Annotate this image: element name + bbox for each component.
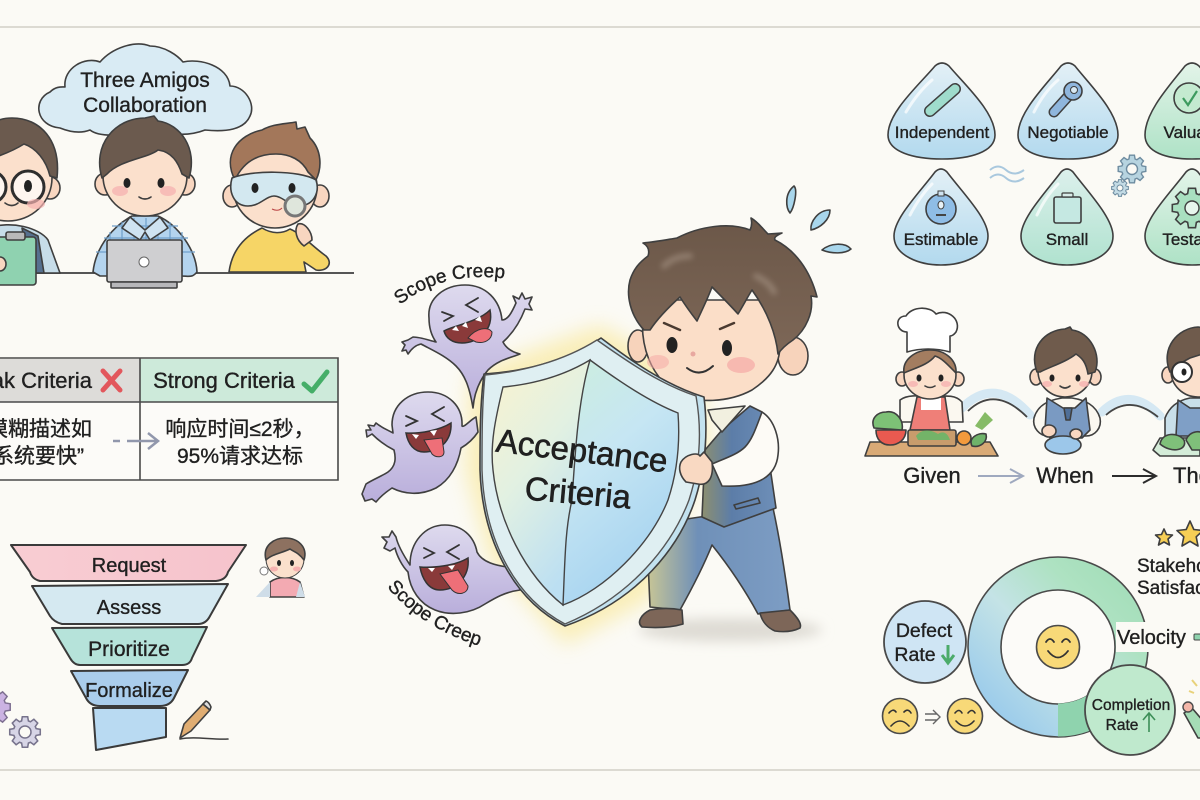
shield right half (563, 360, 679, 605)
drop: independent: Independent (895, 123, 990, 142)
vest pocket (734, 498, 760, 509)
connector arc: when to then (1102, 399, 1160, 417)
icon: large star (1177, 521, 1200, 546)
face: center smile (1036, 626, 1080, 668)
drop: negotiable (1018, 63, 1118, 159)
defect rate bubble: Rate (894, 644, 936, 666)
completion rate bubble: Completion (1092, 697, 1170, 714)
funnel spout (93, 708, 166, 750)
panel: metrics (882, 521, 1200, 755)
hair (629, 218, 817, 354)
table outlines (0, 358, 338, 480)
panel: given when then (865, 308, 1200, 488)
drop: small: Small (1046, 230, 1088, 249)
defect rate bubble (884, 601, 966, 683)
person: cheering arm (1183, 680, 1200, 738)
shield title: Acceptance (494, 422, 670, 479)
completion rate bubble: Rate (1106, 717, 1138, 734)
person: developer with laptop (93, 116, 197, 288)
funnel stage: assess: Assess (97, 597, 161, 619)
strong body text line 2: 95%请求达标 (177, 445, 303, 468)
icon: gear small (1112, 180, 1128, 196)
shoe: left (640, 608, 683, 628)
sweat drop 3 (822, 244, 851, 253)
drop: estimable (894, 169, 988, 265)
icon: green check (304, 372, 327, 391)
shield (480, 338, 706, 626)
connector arc: given to when (962, 393, 1030, 417)
brows (664, 323, 734, 330)
person: chef (865, 308, 998, 456)
eye: left (666, 337, 678, 353)
drop: small (1021, 169, 1113, 265)
table body (0, 402, 338, 480)
panel: funnel (0, 538, 305, 750)
hero illustration (362, 186, 851, 645)
panel: INVEST drops (888, 63, 1200, 265)
shoe: right (760, 610, 801, 632)
bottom border line (0, 769, 1200, 771)
cloud label: Collaboration (83, 94, 207, 117)
legs (648, 508, 790, 614)
face (642, 300, 780, 400)
arrow: sad to happy (925, 710, 940, 724)
floor shadow (638, 618, 822, 642)
sweat drop 2 (811, 210, 830, 230)
velocity label: Velocity (1117, 627, 1186, 649)
icon: pencil (180, 701, 228, 739)
scope creep label: bottom: Scope Creep (388, 580, 481, 648)
velocity label (1116, 622, 1200, 652)
arrow: when to then (1112, 469, 1156, 483)
person: girl with flower (256, 538, 305, 597)
arrow: weak to strong (113, 433, 158, 449)
strong header cell (140, 359, 338, 402)
person: business analyst with glasses and clipboard (0, 118, 60, 285)
icon: gear large (1118, 155, 1146, 183)
icon: small gray gear (10, 717, 40, 747)
drop: testable (1145, 169, 1200, 265)
funnel stage: assess (32, 584, 228, 624)
decorative waves (990, 166, 1024, 182)
hair highlights (664, 256, 774, 292)
top border line (0, 26, 1200, 28)
blush right (727, 357, 755, 373)
funnel stage: formalize (71, 670, 188, 706)
drop: estimable: Estimable (904, 230, 978, 249)
scope creep label: top: Scope Creep (394, 265, 504, 303)
boy (628, 218, 817, 632)
vest (702, 406, 776, 527)
smile (687, 366, 713, 373)
nose (690, 352, 696, 356)
label: given: Given (903, 463, 961, 488)
drop: negotiable: Negotiable (1027, 123, 1109, 142)
funnel stage: request: Request (92, 555, 167, 577)
person: waiter (1030, 327, 1101, 454)
strong heading: Strong Criteria (153, 368, 296, 393)
cloud label: Three Amigos (80, 69, 210, 92)
defect rate bubble: Defect (896, 620, 953, 642)
ghost: top (402, 285, 532, 408)
completion rate bubble (1085, 665, 1175, 755)
icon: purple gear (0, 689, 10, 725)
collar (708, 406, 745, 432)
table line (0, 272, 354, 274)
funnel stage: request (11, 545, 246, 581)
funnel stage: prioritize (52, 627, 207, 665)
face: sad (882, 698, 918, 734)
stakeholder satisfaction label (1137, 556, 1200, 599)
ghost: bottom (382, 525, 520, 613)
strong body text: 响应时间≤2秒， (165, 418, 315, 441)
blush (647, 355, 669, 369)
icon: small star (1156, 529, 1172, 545)
drop: valuable (1145, 63, 1200, 159)
drop: independent (888, 63, 995, 159)
person: tester with glasses (1153, 327, 1200, 456)
weak header cell (0, 359, 140, 402)
ear: left (628, 330, 648, 362)
icon: red cross (103, 371, 120, 390)
ring chart (968, 557, 1148, 737)
funnel stage: formalize: Formalize (85, 680, 173, 702)
panel: three amigos (0, 44, 354, 288)
person: tester with goggles and magnifier (223, 122, 329, 272)
funnel stage: prioritize: Prioritize (88, 638, 170, 661)
face: happy (948, 698, 982, 734)
arrow: given to when (978, 469, 1023, 483)
label: when: When (1036, 463, 1094, 488)
panel: weak vs strong criteria table (0, 358, 338, 480)
ear: right (778, 337, 808, 375)
sleeve (712, 412, 778, 486)
shield title line 2: Criteria (523, 469, 633, 516)
shield glow (465, 325, 710, 645)
boy hand (680, 452, 712, 484)
ghost: middle (362, 392, 478, 502)
sweat drop 1 (787, 186, 796, 213)
eye: right (722, 340, 732, 356)
shield left half (492, 360, 590, 605)
cloud label (39, 44, 252, 135)
